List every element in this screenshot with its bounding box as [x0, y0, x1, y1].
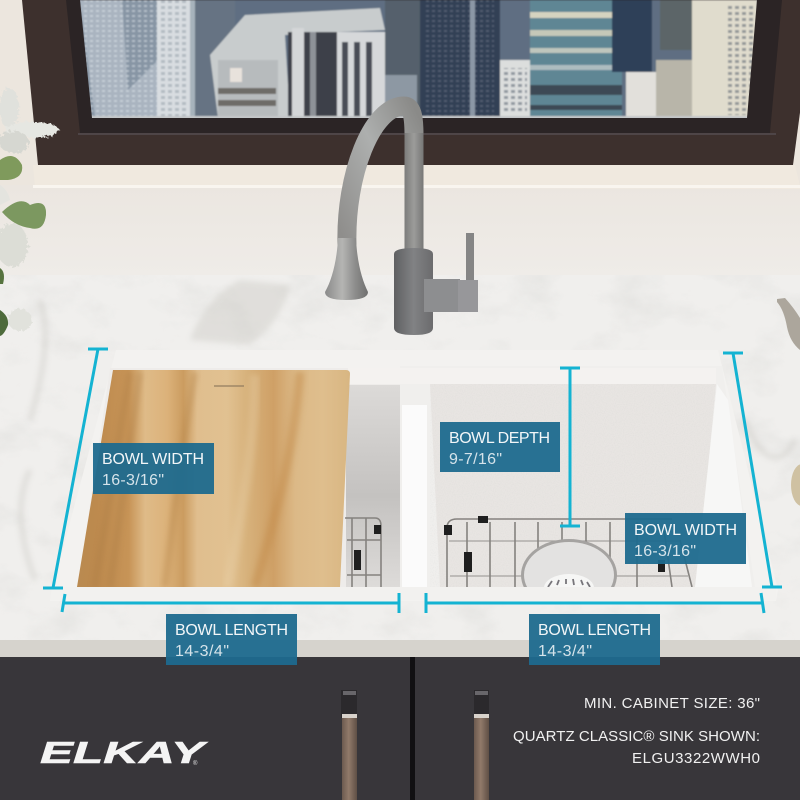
- label: bowl depth: [440, 422, 560, 472]
- sink rim: [50, 350, 778, 601]
- left bowl interior: [78, 368, 402, 587]
- label: left bowl width: 16-3/16": [102, 472, 164, 489]
- cutting board: [77, 370, 350, 587]
- dimension: right bowl length: [426, 593, 764, 613]
- dimension: right bowl width: [723, 353, 782, 587]
- green leaves: [0, 156, 46, 336]
- label: left bowl width: [93, 443, 214, 494]
- label: bowl depth: BOWL DEPTH: [449, 430, 550, 447]
- label: right bowl width: [625, 513, 746, 564]
- lilac flowers lower: [0, 223, 32, 331]
- label: bowl depth: 9-7/16": [449, 451, 502, 468]
- model note: QUARTZ CLASSIC® SINK SHOWN:: [513, 728, 760, 745]
- faucet lever: [466, 233, 474, 283]
- city skyline through window: [70, 0, 770, 120]
- kettle at right edge: [777, 298, 800, 350]
- label: right bowl length: BOWL LENGTH: [538, 622, 651, 639]
- beige object at right edge: [791, 464, 800, 506]
- label: right bowl width: BOWL WIDTH: [634, 522, 737, 539]
- dimension: left bowl width: [43, 349, 108, 588]
- label: right bowl width: 16-3/16": [634, 543, 696, 560]
- logo: Elkay: ®: [193, 760, 198, 767]
- lilac flowers top: [0, 88, 59, 153]
- label: right bowl length: 14-3/4": [538, 643, 592, 660]
- faucet spout arch: [347, 106, 414, 245]
- faucet vertical tube: [404, 133, 424, 255]
- logo: Elkay: ELKAY: [40, 735, 209, 770]
- label: left bowl length: BOWL LENGTH: [175, 622, 288, 639]
- wire rack: [345, 516, 692, 587]
- faucet side cylinder: [424, 279, 478, 312]
- sink front edge: [50, 587, 776, 600]
- window frame: [22, 0, 800, 165]
- cabinets: [0, 657, 800, 800]
- faucet: [325, 106, 478, 335]
- faucet spray head: [325, 238, 368, 300]
- label: left bowl length: [166, 614, 297, 665]
- plant: lilac and leaves: [0, 88, 59, 336]
- label: left bowl length: 14-3/4": [175, 643, 229, 660]
- label: right bowl length: [529, 614, 660, 665]
- model note: ELGU3322WWH0: [632, 750, 760, 767]
- minimum cabinet size note: MIN. CABINET SIZE: 36": [584, 695, 760, 712]
- right bowl interior: [348, 366, 755, 587]
- faucet body: [394, 248, 433, 335]
- drain strainer: [521, 539, 617, 587]
- window sill: [33, 165, 800, 189]
- model note: [513, 728, 760, 767]
- marble countertop: [0, 275, 800, 657]
- logo: Elkay: [40, 735, 209, 770]
- wall and backsplash background: [0, 0, 800, 277]
- dimension: bowl depth: [560, 368, 580, 526]
- cabinet handle right: [474, 690, 489, 800]
- cabinet handle left: [341, 690, 357, 800]
- label: left bowl width: BOWL WIDTH: [102, 451, 204, 468]
- center divider: [402, 405, 427, 587]
- dimension lines: [43, 349, 782, 613]
- dimension: left bowl length: [62, 593, 399, 613]
